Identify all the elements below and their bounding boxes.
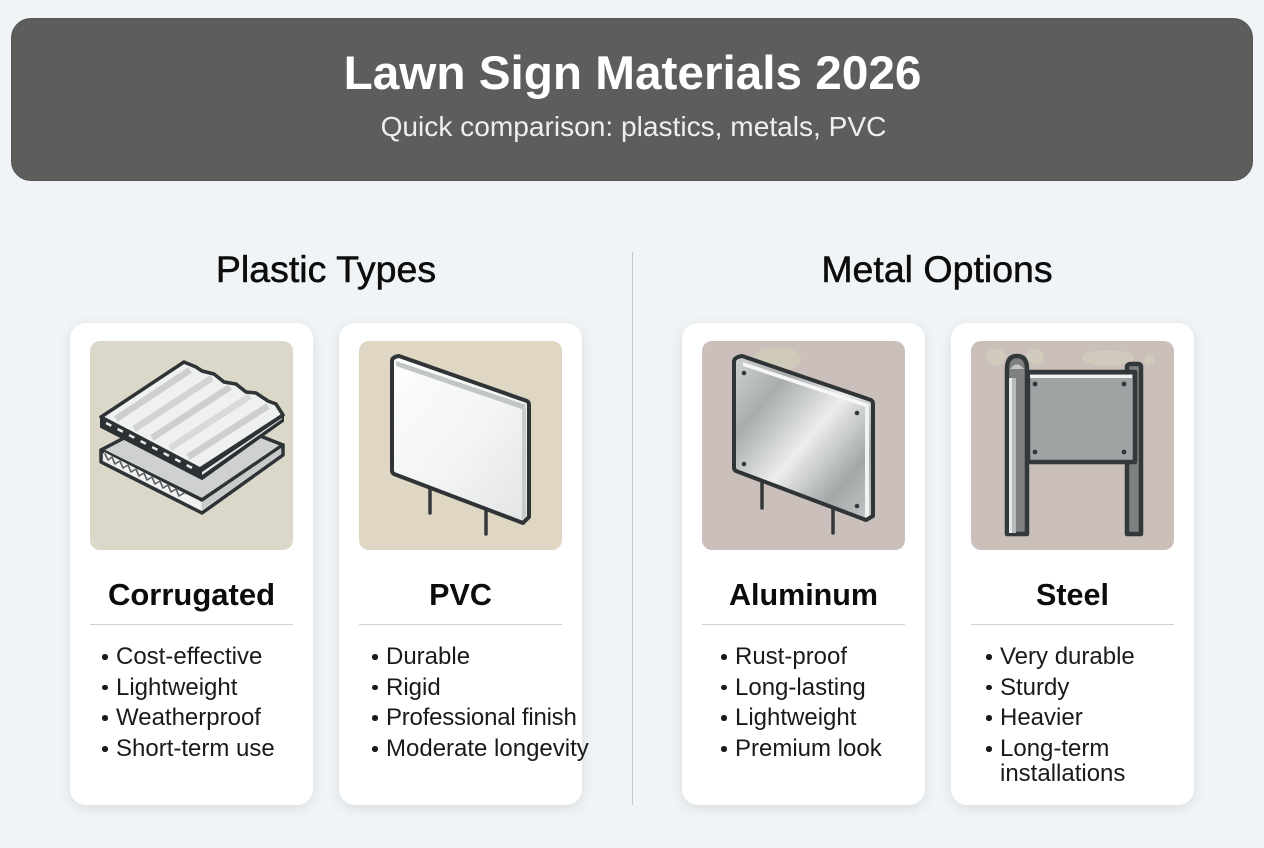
list: PVC features: Moderate longevity [386, 735, 589, 762]
list: steel features [986, 643, 1135, 787]
vertical divider [632, 252, 633, 805]
icon: PVC sign [359, 341, 562, 550]
heading: metal options: Metal Options [821, 248, 1053, 290]
list: PVC features: Rigid [386, 674, 441, 701]
list: aluminum features: Premium look [735, 735, 882, 762]
list: PVC features: Durable [386, 643, 470, 670]
title: aluminum: Aluminum [729, 578, 878, 612]
top sheet [101, 415, 283, 479]
subtitle: Quick comparison: plastics, metals, PVC [381, 111, 886, 142]
list: PVC features [372, 643, 589, 762]
list: steel features: Very durable [1000, 643, 1135, 670]
list: aluminum features [721, 643, 882, 762]
icon: corrugated plastic sheets [90, 341, 293, 550]
panel: corrugated [70, 323, 313, 805]
list: steel features: installations [1000, 760, 1125, 787]
title: corrugated: Corrugated [108, 577, 275, 612]
list: steel features: Sturdy [1000, 674, 1069, 701]
panel: steel [951, 323, 1194, 805]
list: corrugated features: Weatherproof [116, 704, 261, 731]
title: Lawn Sign Materials 2026 [344, 47, 921, 100]
header banner [11, 18, 1253, 181]
list: aluminum features: Lightweight [735, 704, 856, 731]
lower sheet [101, 406, 283, 500]
icon: aluminum sign [702, 341, 905, 550]
list: steel features: Heavier [1000, 704, 1083, 731]
list: corrugated features: Lightweight [116, 674, 237, 701]
list: steel features: Long-term [1000, 735, 1109, 762]
list: aluminum features: Rust-proof [735, 643, 847, 670]
panel: aluminum [682, 323, 925, 805]
icon: steel sign [971, 341, 1174, 550]
panel: PVC [339, 323, 582, 805]
list: corrugated features: Cost-effective [116, 643, 262, 670]
title: steel: Steel [1036, 578, 1109, 612]
list: corrugated features [102, 643, 275, 762]
list: PVC features: Professional finish [386, 704, 577, 731]
list: aluminum features: Long-lasting [735, 674, 866, 701]
title: PVC: PVC [429, 578, 492, 612]
list: corrugated features: Short-term use [116, 735, 275, 762]
heading: plastic types: Plastic Types [216, 248, 436, 290]
